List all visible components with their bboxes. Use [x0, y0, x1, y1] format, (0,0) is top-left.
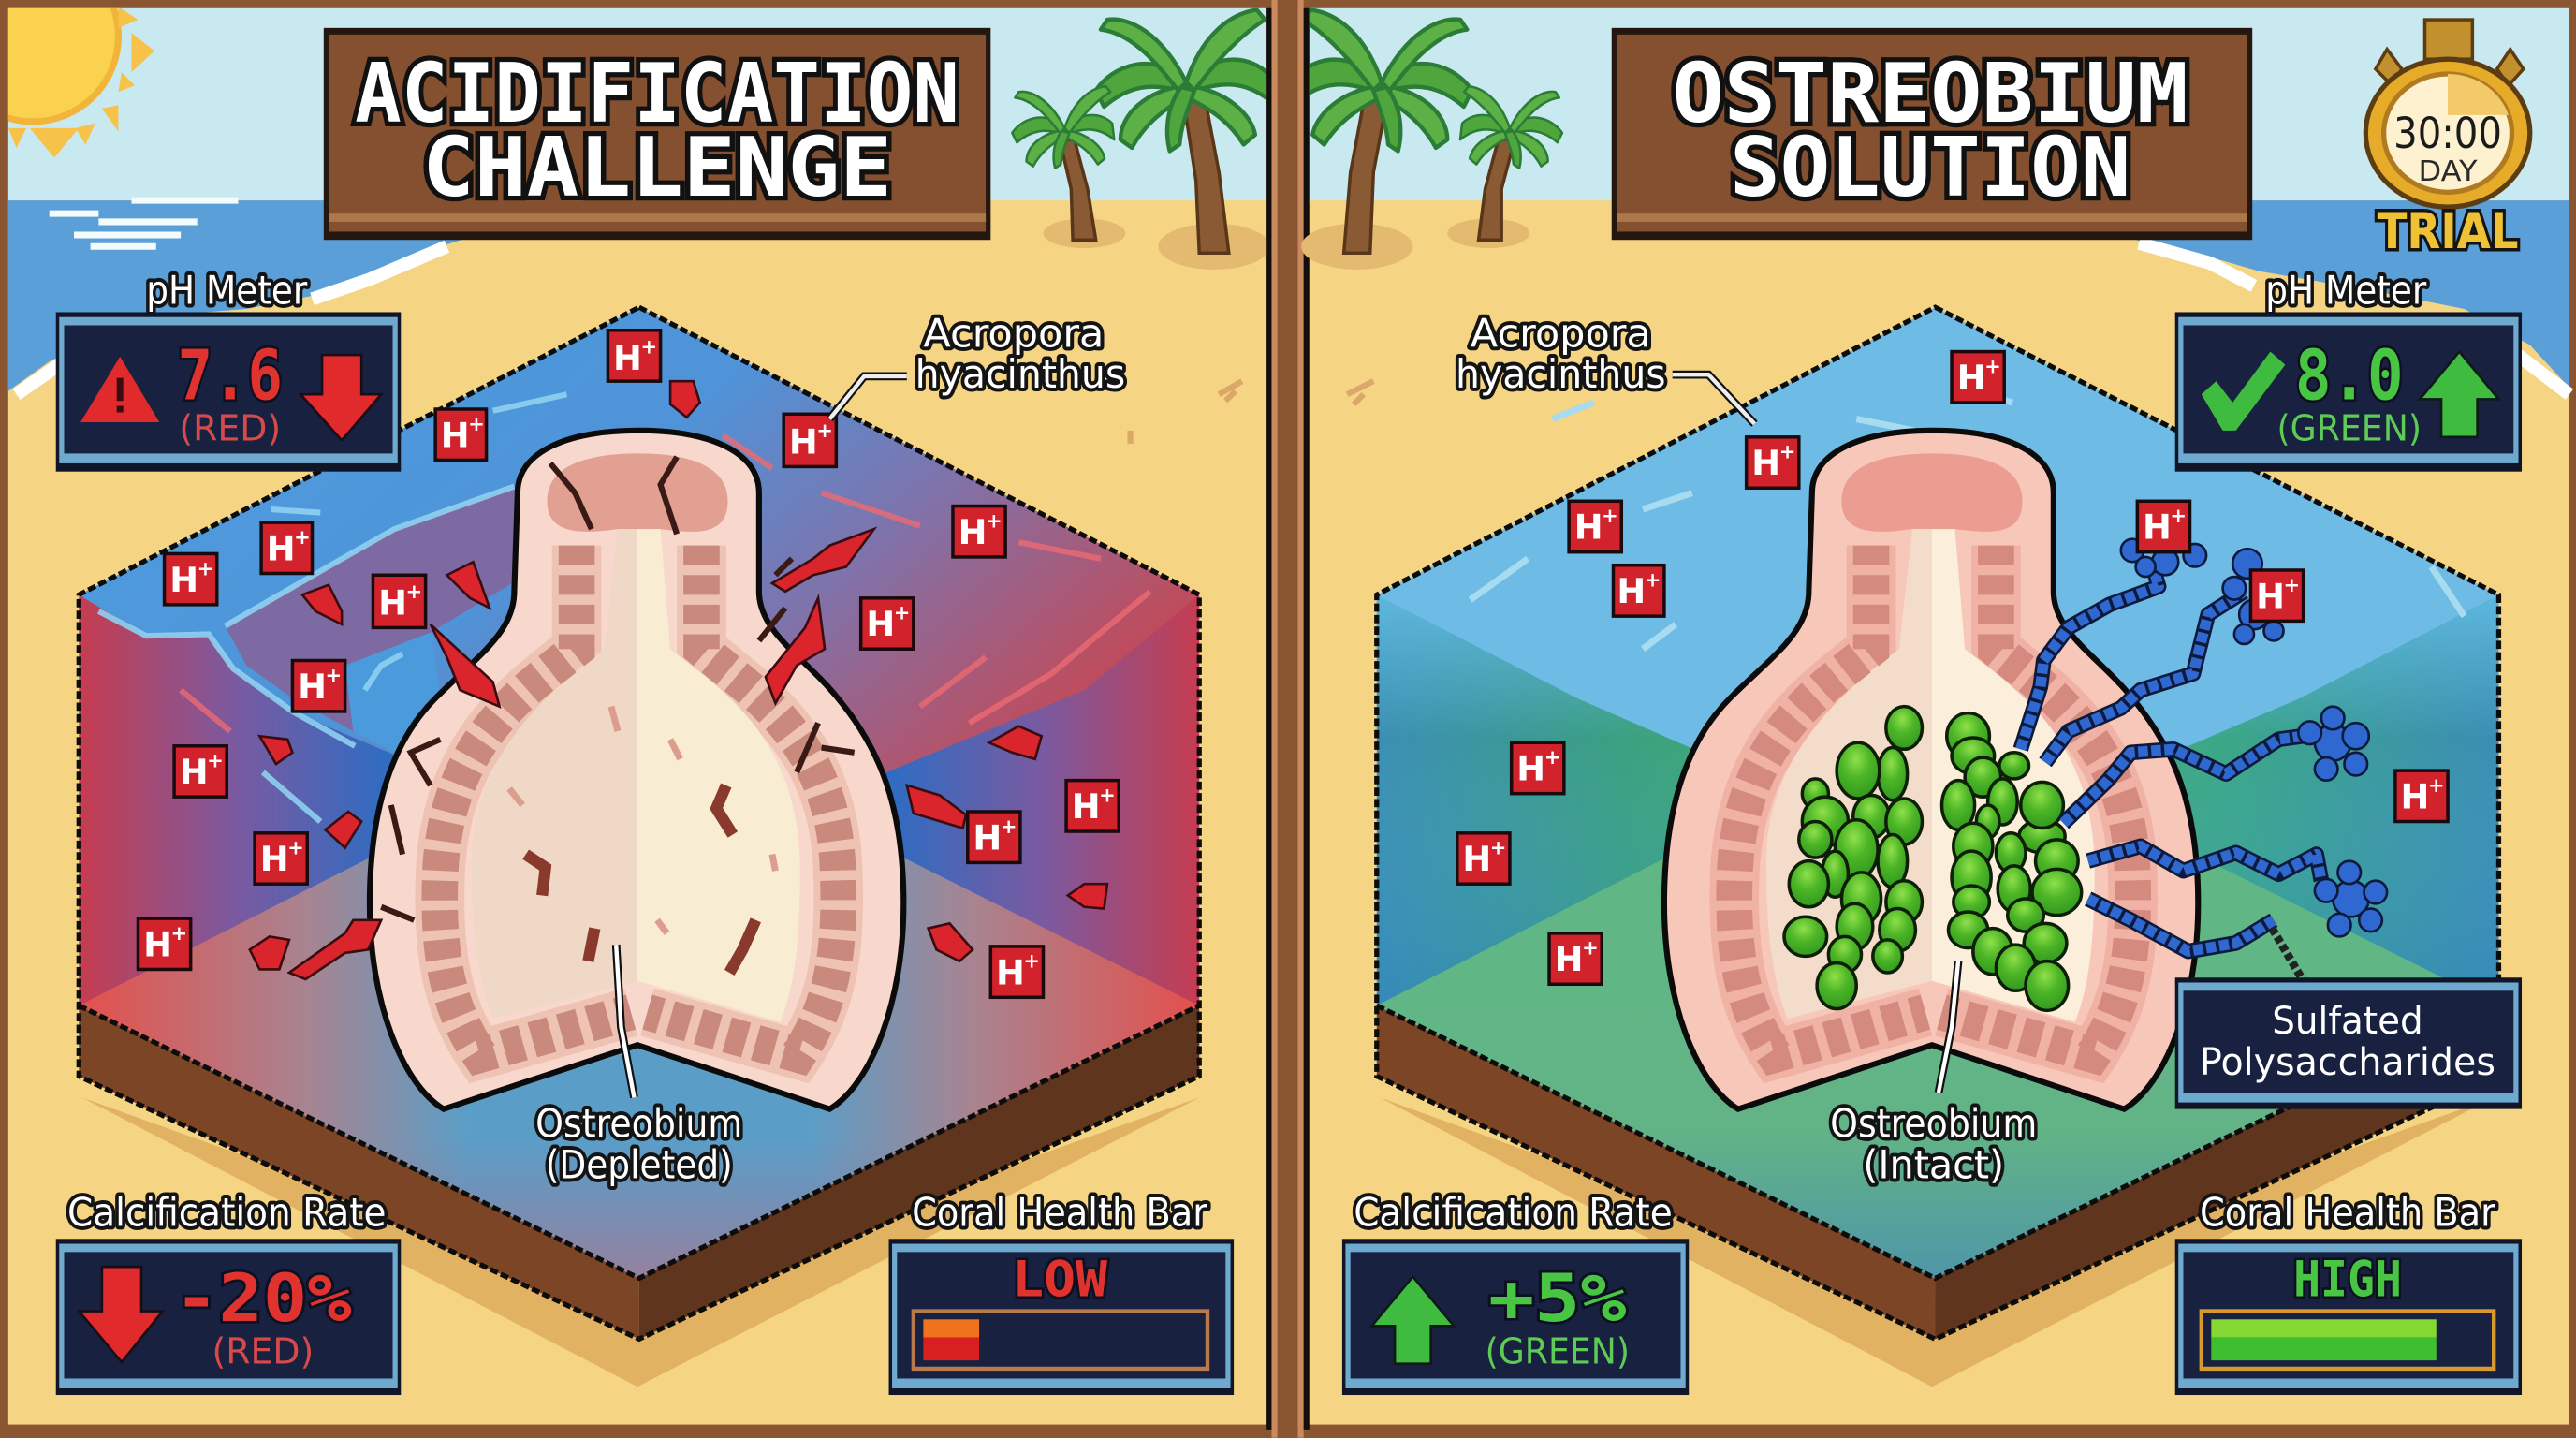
H+ ion: +: [1490, 836, 1506, 859]
H+ ion: +: [406, 580, 422, 603]
H+ ion: H: [180, 752, 209, 792]
palm tree: large: [1296, 10, 1472, 253]
label: Acropora hyacinthus: hyacinthus: [1456, 351, 1666, 397]
icon: warning triangle: [80, 357, 159, 422]
seabed depth shade: [79, 772, 1199, 1278]
H+ ion: H: [441, 415, 470, 455]
H+ ion: [165, 553, 217, 605]
label: Acropora hyacinthus: [1456, 310, 1754, 424]
timer trial: TRIAL: [2378, 203, 2519, 260]
cavity right: [1932, 529, 2095, 1022]
isometric block: [79, 307, 1199, 1339]
H+ ion: [2137, 501, 2190, 552]
H+ ion: +: [640, 334, 657, 358]
wall band right: [648, 546, 839, 1055]
label: Acropora hyacinthus: Acropora: [1471, 310, 1651, 356]
calcification value: -20%: [174, 1260, 352, 1337]
wall band left: [1734, 546, 1925, 1055]
H+ ion: +: [1602, 504, 1618, 527]
H+ ion: [783, 414, 836, 466]
health status: LOW: [1012, 1252, 1107, 1309]
icon: down arrow: [79, 1267, 163, 1362]
sand specks: [1131, 381, 1242, 444]
H+ ion: [2250, 570, 2304, 621]
acid streaks: [181, 435, 1150, 731]
palm shadow: [1158, 224, 1270, 270]
label: pH meter: pH Meter: [146, 268, 308, 314]
H+ ion: H: [996, 952, 1025, 992]
coral cross section: [370, 431, 903, 1109]
sign: acidification challenge: [324, 28, 990, 240]
calcification note: (GREEN): [1486, 1331, 1630, 1373]
H+ ion: H: [2401, 776, 2429, 816]
purple acid wedge: [225, 486, 526, 731]
health status: HIGH: [2293, 1252, 2402, 1309]
blue pocket: [345, 633, 440, 753]
H+ ion: [990, 946, 1044, 997]
panel: ostreobium solution: [1296, 8, 2569, 1425]
H+ ion: +: [1544, 745, 1560, 769]
H+ ion: [1569, 501, 1621, 552]
block shadow: [82, 1097, 1199, 1387]
icon: up arrow: [1372, 1277, 1454, 1364]
icon: sun: [0, 0, 154, 157]
depleted ostreobium fragments: [526, 785, 755, 973]
panel: calcification rate: [56, 1239, 401, 1395]
label: Ostreobium intact: [1830, 961, 2037, 1187]
H+ ion: +: [894, 601, 910, 624]
wall cells right: [1942, 546, 2133, 1055]
H+ ion: H: [298, 667, 327, 707]
sea foam: [2139, 243, 2569, 394]
H+ ion: [1549, 933, 1602, 984]
calcification note: (RED): [212, 1331, 314, 1373]
H+ ion: +: [1645, 568, 1661, 592]
polysaccharide clusters: [2121, 539, 2387, 936]
heading line 1: OSTREOBIUM: [1673, 46, 2188, 141]
H+ ion: [607, 330, 661, 381]
wall cells left: [1734, 546, 1925, 1055]
H+ ion: +: [816, 418, 833, 442]
red acid arrows: [250, 381, 1107, 979]
block side left: [1377, 1005, 1935, 1339]
H+ ion: [138, 918, 191, 969]
icon: stopwatch: [2365, 20, 2530, 260]
label: Ostreobium intact: (Intact): [1863, 1141, 2004, 1187]
H+ ion: +: [207, 749, 224, 772]
H+ ion: +: [986, 508, 1003, 532]
sea foam: [17, 246, 446, 394]
water wall right: [1935, 493, 2498, 1278]
H+ ion: [1457, 833, 1510, 884]
H+ ion: H: [169, 560, 198, 600]
palm tree: small: [1012, 86, 1114, 240]
H+ ion: [261, 522, 313, 574]
H+ ion: H: [789, 421, 818, 462]
isometric block: [1377, 307, 2498, 1339]
cavity left: [1766, 529, 1932, 1019]
H+ ion: H: [959, 512, 987, 552]
label: Ostreobium intact: Ostreobium: [1830, 1100, 2037, 1146]
chain beads: [2021, 559, 2326, 951]
H+ ion: +: [287, 836, 304, 859]
label: calcification rate: Calcification Rate: [1354, 1189, 1673, 1235]
H+ ion: H: [613, 338, 642, 378]
coral body: [1664, 431, 2198, 1109]
H+ ion: H: [378, 582, 407, 623]
water wall tint: [1377, 594, 2498, 1005]
H+ ion: +: [294, 525, 311, 549]
H+ ion: H: [1555, 939, 1584, 979]
coral rim: [547, 453, 728, 532]
water wall right: [639, 493, 1199, 1278]
label: coral health bar: Coral Health Bar: [912, 1189, 1208, 1235]
H+ ion: +: [1099, 783, 1116, 806]
H+ ion: H: [1957, 358, 1986, 398]
palm tree: small: [1460, 86, 1562, 240]
cavity right: [637, 529, 800, 1022]
H+ ion: [953, 506, 1005, 557]
wall cells right: [648, 546, 839, 1055]
H+ ion: H: [260, 839, 289, 879]
health bar track: [914, 1312, 1208, 1369]
sign: ostreobium solution: [1612, 28, 2252, 240]
seabed: [79, 772, 1199, 1278]
label: coral health bar: Coral Health Bar: [2200, 1189, 2496, 1235]
pH value: 8.0: [2295, 336, 2404, 416]
calcification value: +5%: [1488, 1260, 1627, 1337]
timer value: 30:00: [2393, 109, 2502, 158]
icon: up arrow: [2420, 352, 2498, 437]
H+ ion: +: [468, 412, 485, 435]
H+ ion: H: [1617, 571, 1646, 611]
panel: sulfated polysaccharides: [2175, 977, 2522, 1109]
panel: calcification rate: [1342, 1239, 1689, 1395]
timer unit: DAY: [2418, 155, 2478, 188]
H+ ion: [1747, 437, 1799, 488]
H+ ion: H: [2256, 576, 2285, 616]
block outline: [79, 307, 1199, 1339]
H+ ion: +: [171, 921, 187, 945]
background: sky: [1310, 8, 2569, 202]
block shadow: [1380, 1097, 2494, 1387]
H+ ion: +: [1984, 354, 2001, 377]
H+ ion: [1952, 352, 2004, 403]
health bar track: [2202, 1312, 2494, 1369]
leader: sulfated polysaccharides: [2272, 929, 2304, 981]
background: sand: [8, 200, 1266, 1425]
panel: sulfated polysaccharides: Polysaccharides: [2200, 1040, 2496, 1084]
pH value: 7.6: [178, 336, 283, 416]
cavity left: [472, 529, 637, 1019]
panel: sulfated polysaccharides: Sulfated: [2272, 999, 2423, 1043]
heading line 2: CHALLENGE: [422, 120, 892, 215]
wall band right: [1942, 546, 2133, 1055]
block outline: [1377, 307, 2498, 1339]
H+ ion: +: [1001, 814, 1017, 838]
seabed: [1377, 772, 2498, 1278]
panel: coral health: [2175, 1239, 2522, 1395]
block side right: [1935, 1005, 2498, 1339]
background: sea: [8, 200, 624, 391]
H+ ion: H: [973, 817, 1002, 858]
sea ripples: [50, 200, 239, 246]
H+ ion: +: [1779, 440, 1795, 463]
H+ ion: [2395, 770, 2448, 822]
water wall left: [1377, 493, 1935, 1278]
label: calcification rate: Calcification Rate: [67, 1189, 386, 1235]
H+ ion: H: [267, 528, 296, 568]
palm tree: large: [1096, 10, 1271, 253]
coral rim: [1841, 453, 2022, 532]
panel: pH meter: [2175, 312, 2522, 472]
H+ ion: H: [1516, 749, 1545, 789]
H+ ion: [861, 598, 914, 649]
palm shadow: [1301, 224, 1412, 270]
label: pH meter: pH Meter: [2265, 268, 2427, 314]
icon: down arrow: [300, 355, 381, 440]
H+ ion: H: [1574, 507, 1603, 548]
H+ ion: [1512, 742, 1564, 794]
divider: [1266, 0, 1310, 1438]
sulfated polysaccharide chains: [2021, 559, 2326, 951]
H+ ion: +: [326, 663, 342, 686]
ostreobium: healthy green cells: [1784, 707, 2082, 1010]
coral cross section: [1664, 431, 2198, 1109]
palm tree small shadow: [1044, 218, 1125, 248]
water wall left: [79, 493, 639, 1278]
palm tree small shadow: [1447, 218, 1530, 248]
H+ ion: [373, 575, 426, 627]
background: sea: [2136, 200, 2569, 388]
coral cracks: [381, 457, 855, 920]
pH colour note: (RED): [179, 407, 281, 449]
heading line 1: ACIDIFICATION: [355, 46, 959, 141]
sand specks: [1347, 381, 1373, 404]
icon: check mark: [2202, 352, 2285, 431]
H+ ion: [292, 661, 345, 712]
water ripples: [1471, 386, 2465, 649]
H+ ion: H: [143, 924, 172, 964]
label: Acropora hyacinthus: hyacinthus: [915, 351, 1125, 397]
H+ ion: +: [198, 556, 213, 580]
wall band left: [440, 546, 631, 1055]
water surface: [79, 307, 1199, 855]
H+ ion: [174, 746, 227, 797]
H+ ion: H: [2143, 507, 2172, 548]
label: Acropora hyacinthus: Acropora: [923, 310, 1104, 356]
H+ ion: +: [1582, 936, 1599, 960]
coral body: [370, 431, 903, 1109]
block side left: [79, 1005, 639, 1339]
H+ ion: [435, 409, 487, 460]
H+ ion: H: [866, 604, 895, 644]
H+ ion: [1613, 565, 1664, 616]
health bar fill: [2211, 1319, 2437, 1360]
pH colour note: (GREEN): [2277, 407, 2422, 449]
H+ ion: +: [2284, 573, 2300, 596]
heading line 2: SOLUTION: [1730, 120, 2130, 215]
H+ ion: +: [2428, 773, 2445, 797]
H+ ion: [968, 812, 1020, 862]
panel: coral health: [889, 1239, 1234, 1395]
health bar fill: [923, 1319, 979, 1360]
H+ ion: H: [1072, 786, 1101, 827]
panel: acidification challenge: [0, 0, 1271, 1425]
pale fleck: [509, 707, 775, 933]
panel: pH meter: [56, 312, 401, 472]
H+ ion: H: [1462, 839, 1491, 879]
label: Ostreobium depleted: [535, 945, 742, 1187]
chain outline: [2021, 559, 2326, 951]
label: Acropora hyacinthus: [829, 310, 1125, 419]
H+ ion: [255, 833, 307, 884]
H+ ion: [1066, 781, 1119, 831]
H+ ion: +: [1023, 949, 1040, 973]
water streaks: [98, 394, 567, 822]
label: Ostreobium depleted: (Depleted): [546, 1141, 733, 1187]
H+ ion: H: [1751, 443, 1780, 483]
H+ ion: +: [2170, 504, 2187, 527]
block side right: [639, 1005, 1199, 1339]
wall cells left: [440, 546, 631, 1055]
label: Ostreobium depleted: Ostreobium: [535, 1100, 742, 1146]
background: sky: [8, 8, 1266, 202]
background: sand: [1310, 200, 2569, 1425]
water surface: [1377, 307, 2498, 855]
